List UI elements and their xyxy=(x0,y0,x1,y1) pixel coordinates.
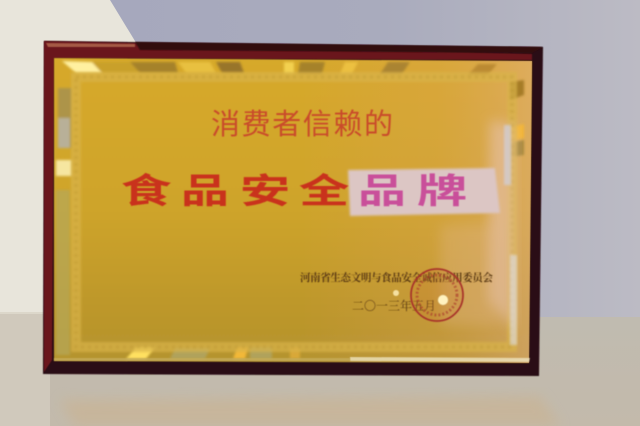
title: 食品安全品牌: 品 xyxy=(358,172,406,210)
title: 食品安全品牌: 牌 xyxy=(417,173,467,211)
decorative inner border xyxy=(76,77,512,347)
issuer text: 河南省生态文明与食品安全诚信应用委员会 xyxy=(300,270,494,285)
title: 食品安全品牌: 品 xyxy=(181,172,229,210)
title: 食品安全品牌: 食 xyxy=(121,173,171,211)
gold plate xyxy=(54,58,532,363)
heading: 消费者信赖的: 消费者信赖的 xyxy=(211,108,393,141)
title: 食品安全品牌 xyxy=(121,172,467,211)
plaque wooden frame xyxy=(43,41,543,376)
glass reflection at right edge xyxy=(54,120,530,362)
plate border stripes xyxy=(56,61,524,359)
white glare patch behind title xyxy=(348,168,500,216)
red round seal xyxy=(393,269,463,321)
title: 食品安全品牌: 全 xyxy=(299,173,349,211)
date text: 二〇一三年五月 xyxy=(352,297,436,314)
title: 食品安全品牌: 安 xyxy=(240,173,290,211)
